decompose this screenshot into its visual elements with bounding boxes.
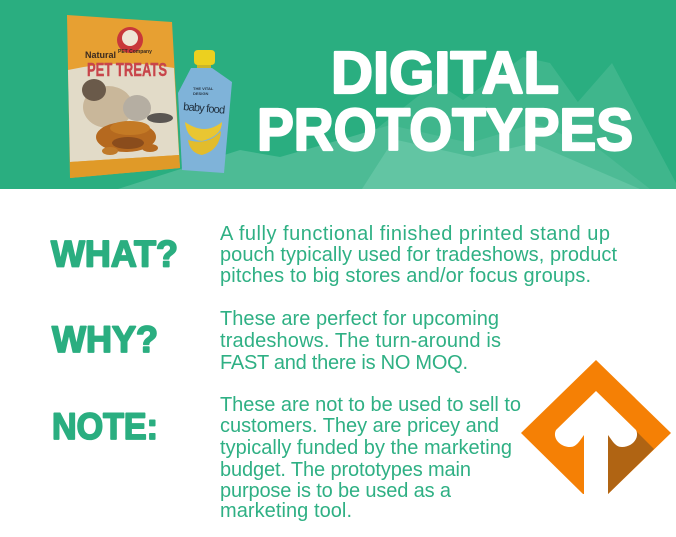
product image: baby food spout pouch (178, 50, 232, 173)
product image: pet treats pouch: PET Company (118, 49, 152, 55)
text block: why: FAST and there is NO MOQ. (220, 352, 468, 374)
product image: baby food spout pouch: DESIGN (193, 91, 208, 96)
text block: what: pitches to big stores and/or focus groups. (220, 265, 591, 287)
text block: note: marketing tool. (220, 500, 352, 522)
text block: what: A fully functional finished printed stand up (220, 223, 610, 245)
text block: why: These are perfect for upcoming (220, 308, 499, 330)
product image: pet treats pouch: Natural (85, 50, 116, 60)
product image: pet treats pouch: PET TREATS (87, 60, 167, 80)
heading: note: NOTE: (52, 406, 158, 447)
text block: why (220, 308, 501, 374)
header banner (0, 0, 676, 189)
product image: baby food spout pouch: THE VITAL (193, 86, 214, 91)
text block: note: purpose is to be used as a (220, 480, 452, 502)
text block: what (220, 223, 617, 287)
text block: note: customers. They are pricey and (220, 415, 499, 437)
title: PROTOTYPES (257, 97, 633, 163)
product image: pet treats pouch (67, 15, 180, 178)
icon: orange diamond with up arrow (521, 360, 671, 494)
text block: what: pouch typically used for tradeshows, product (220, 244, 617, 266)
text block: note (220, 394, 521, 522)
heading: what: WHAT? (51, 234, 178, 274)
text block: note: typically funded by the marketing (220, 437, 512, 459)
product image: baby food spout pouch: baby food (183, 101, 226, 117)
text block: why: tradeshows. The turn-around is (220, 330, 501, 352)
heading: why: WHY? (52, 319, 158, 360)
title: DIGITAL (331, 40, 559, 106)
text block: note: These are not to be used to sell to (220, 394, 521, 416)
text block: note: budget. The prototypes main (220, 459, 471, 481)
title (257, 40, 633, 163)
